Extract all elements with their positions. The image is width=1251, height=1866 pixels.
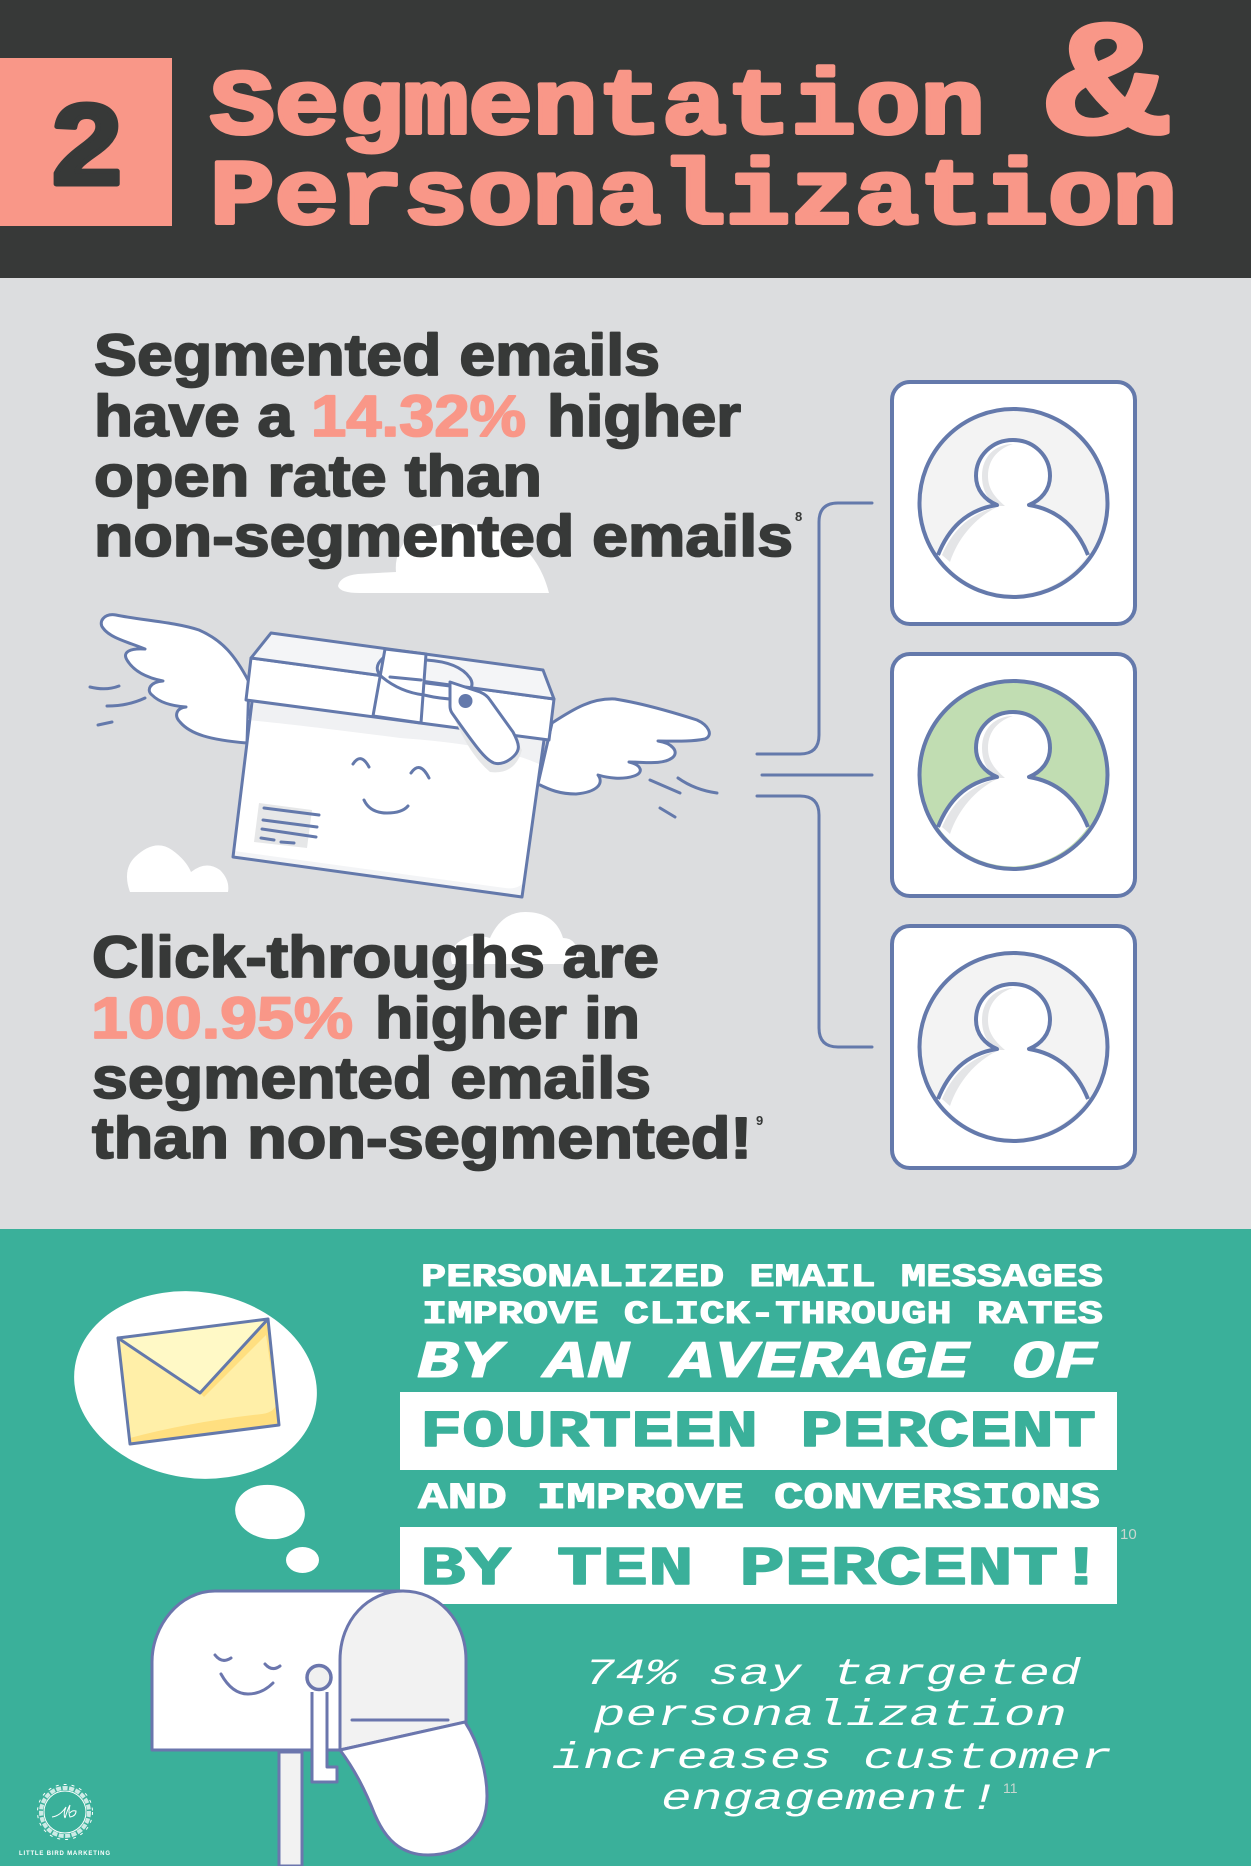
stat text: click-throughs: than non-segmented!	[92, 1106, 752, 1171]
section number badge	[0, 58, 172, 226]
stat text: click-throughs: segmented emails	[92, 1046, 651, 1111]
stat text: targeted personalization: 11	[1003, 1780, 1018, 1796]
title: Segmentation	[210, 56, 985, 161]
box shading	[248, 702, 544, 765]
title: &	[1046, 0, 1168, 183]
right wing	[538, 699, 709, 794]
connector lines	[757, 503, 872, 1047]
stat text: open rate: have a	[94, 384, 294, 449]
shipping tag	[450, 682, 522, 772]
panel: personalization	[0, 1229, 1251, 1866]
headline copy: BY AN AVERAGE OF	[417, 1333, 1099, 1393]
headline copy: PERSONALIZED EMAIL MESSAGES	[421, 1259, 1103, 1296]
tape	[373, 649, 426, 723]
stat text: click-throughs: higher in	[375, 986, 640, 1051]
card: profile 3	[892, 926, 1135, 1168]
stat text: open rate: 14.32%	[311, 384, 526, 449]
headline copy	[400, 1259, 1137, 1604]
stat text: click-throughs: 100.95%	[91, 986, 353, 1051]
box body	[233, 702, 544, 897]
address label	[254, 803, 319, 848]
motion lines	[90, 686, 717, 817]
title: Personalization	[210, 146, 1177, 251]
highlight: fourteen percent	[400, 1392, 1117, 1470]
cloud behind first stat	[338, 524, 549, 593]
stat text: click-throughs	[91, 925, 763, 1171]
stat text: open rate: open rate than	[94, 444, 542, 509]
stat text: click-throughs: 9	[756, 1113, 763, 1128]
stat text: open rate: higher	[547, 384, 741, 449]
post	[279, 1752, 302, 1866]
cloud lower left	[127, 845, 228, 892]
card: profile 2 highlighted	[892, 654, 1135, 896]
highlight: ten percent	[400, 1527, 1117, 1604]
envelope	[118, 1319, 279, 1444]
section number badge: 2	[52, 82, 122, 209]
stat text: targeted personalization: 74% say targeted	[584, 1654, 1082, 1696]
stat text: targeted personalization	[552, 1654, 1112, 1821]
stat text: targeted personalization: personalization	[593, 1695, 1067, 1737]
stat text: targeted personalization: increases customer	[552, 1738, 1112, 1780]
logo: little bird marketing	[19, 1784, 110, 1857]
logo: little bird marketing: LITTLE BIRD MARKETING	[19, 1851, 110, 1857]
headline copy: IMPROVE CLICK-THROUGH RATES	[422, 1296, 1103, 1333]
stat text: open rate	[94, 323, 802, 569]
face	[353, 759, 429, 813]
left wing	[101, 615, 249, 743]
stat text: targeted personalization: engagement!	[661, 1779, 999, 1821]
open door interior	[340, 1591, 466, 1750]
mailbox illustration	[152, 1591, 487, 1866]
lid front	[246, 658, 554, 740]
cloud behind second stat	[451, 912, 578, 964]
headline copy: 10	[1120, 1526, 1137, 1543]
headline copy: AND IMPROVE CONVERSIONS	[418, 1478, 1100, 1520]
lid top	[251, 633, 554, 699]
highlight: ten percent: BY TEN PERCENT!	[420, 1538, 1104, 1601]
mailbox body	[152, 1591, 403, 1750]
thought bubble with envelope	[60, 1274, 331, 1573]
header band	[0, 0, 1251, 278]
door flap	[340, 1722, 487, 1855]
flag	[307, 1666, 337, 1782]
ribbon	[377, 658, 472, 699]
title	[210, 0, 1177, 251]
highlight: fourteen percent: FOURTEEN PERCENT	[420, 1403, 1096, 1462]
stat text: click-throughs: Click-throughs are	[92, 925, 659, 990]
stat text: open rate: non-segmented emails	[94, 504, 793, 569]
panel: segmentation	[0, 278, 1251, 1229]
illustration: flying parcel	[90, 615, 717, 897]
stat text: open rate: Segmented emails	[94, 323, 660, 388]
card: profile 1	[892, 382, 1135, 624]
stat text: open rate: 8	[795, 509, 802, 524]
sleeping face	[215, 1655, 280, 1694]
